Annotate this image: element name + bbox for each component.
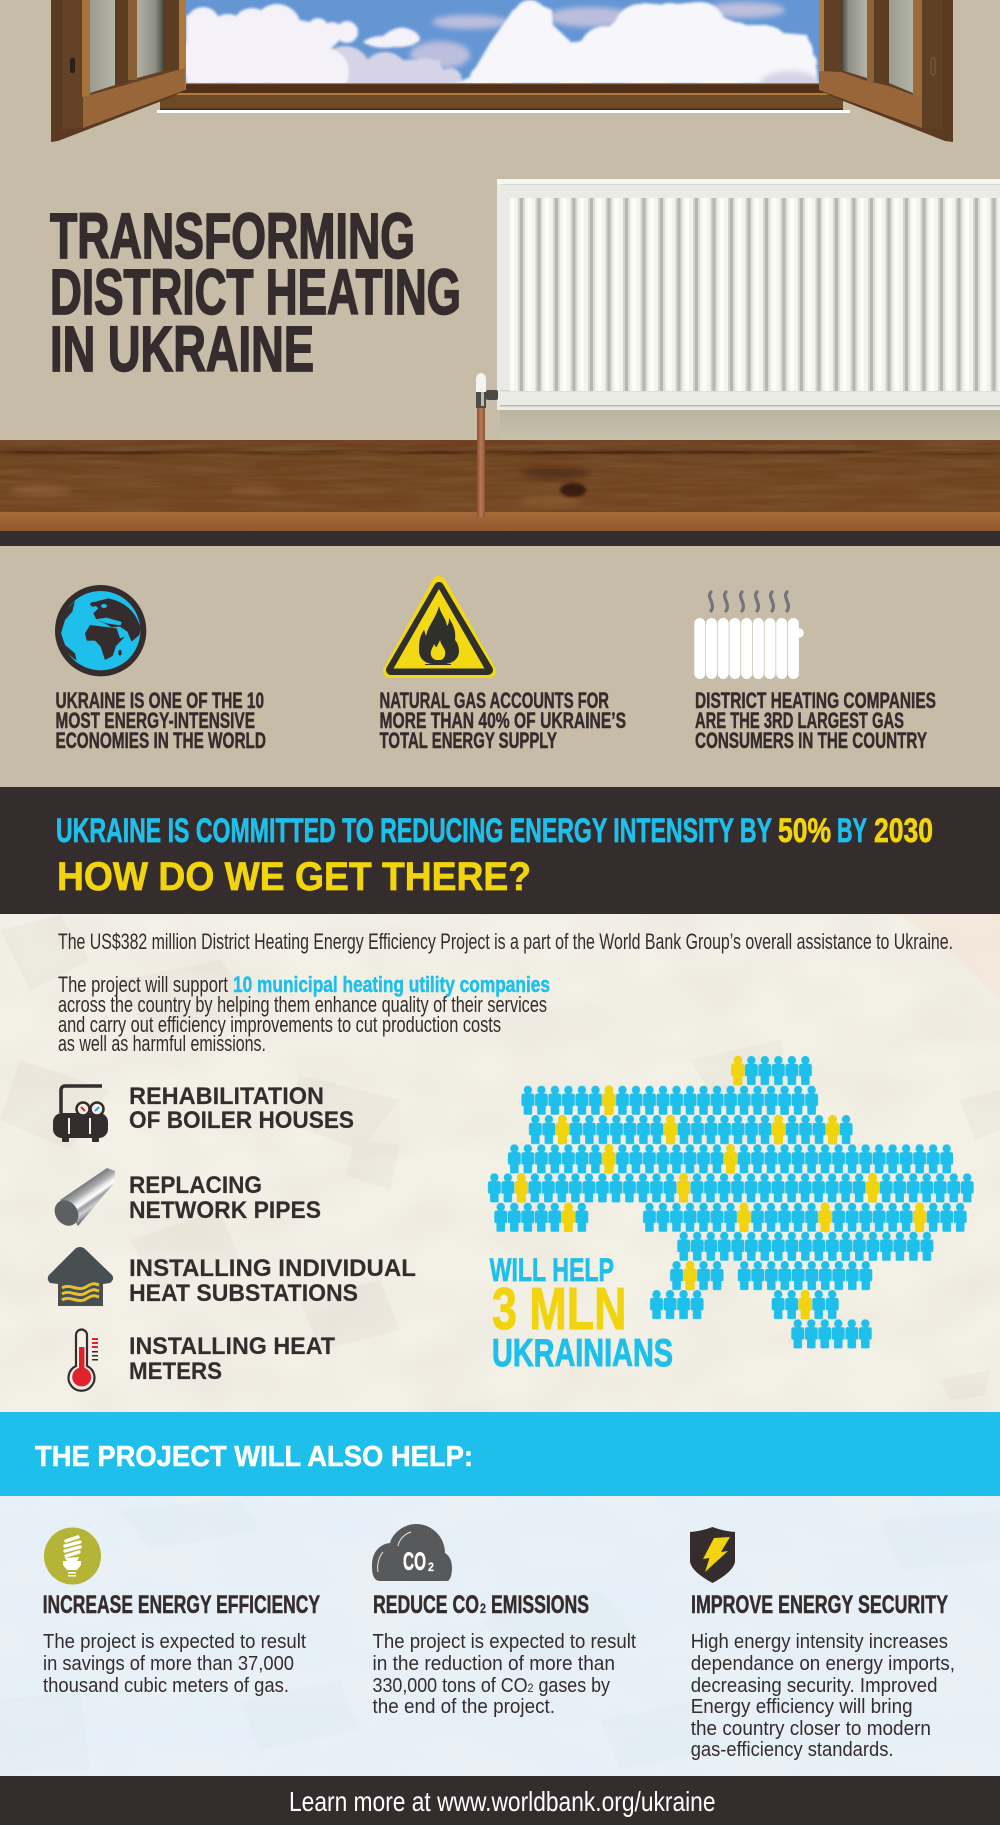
efficiency text: in savings of more than 37,000 [43,1653,294,1675]
project support text: The project will support [58,972,228,997]
heat meters text: METERS [129,1358,222,1385]
window with open shutters and sky [51,0,953,142]
callout: will help 3 mln Ukrainians: WILL HELP [490,1252,614,1288]
question heading: HOW DO WE GET THERE? [57,855,531,899]
icon: flammable warning triangle [390,583,489,671]
dark divider bar [0,531,1000,546]
security text: the country closer to modern [691,1718,931,1740]
commitment headline: 50% [778,812,831,850]
radiator fins [510,198,1000,391]
efficiency text: thousand cubic meters of gas. [43,1675,289,1697]
project support text [58,972,550,1056]
callout: will help 3 mln Ukrainians: 3 MLN [492,1276,626,1342]
heat substations text [129,1255,416,1307]
radiator shadow [500,410,1000,440]
emissions heading: REDUCE CO [373,1591,479,1619]
banner: commitment [0,787,1000,914]
icon: radiator with steam [694,592,804,679]
replacing pipes text [129,1172,321,1224]
callout: will help 3 mln Ukrainians [490,1252,673,1375]
project support text: and carry out efficiency improvements to cut production costs [58,1012,501,1037]
icon: energy saving bulb [44,1528,101,1584]
icon: pipe [50,1168,115,1230]
fact: energy intensive economies: ECONOMIES IN THE WORLD [56,728,266,753]
emissions text: in the reduction of more than [372,1653,615,1675]
emissions heading: 2 [480,1600,486,1616]
icon: CO2 cloud [372,1524,452,1581]
project support text: across the country by helping them enhance quality of their services [58,992,547,1017]
security text: High energy intensity increases [691,1631,948,1653]
icon: CO2 cloud: 2 [428,1560,434,1574]
emissions heading: EMISSIONS [491,1591,589,1619]
heat substations text: HEAT SUBSTATIONS [129,1280,358,1307]
fact: natural gas share: NATURAL GAS ACCOUNTS FOR [380,688,609,713]
banner: the project will also help [0,1412,1000,1496]
emissions text: 330,000 tons of CO2 gases by [372,1675,610,1697]
security text [691,1631,955,1761]
security text: decreasing security. Improved [691,1675,938,1697]
commitment headline: BY [837,812,867,850]
fact: energy intensive economies: UKRAINE IS ONE OF THE 10 [56,688,264,713]
security text: Energy efficiency will bring [691,1696,913,1718]
footer link text: Learn more at www.worldbank.org/ukraine [289,1786,716,1817]
clouds [186,0,819,83]
fact: natural gas share: MORE THAN 40% OF UKRAINE’S [380,708,626,733]
rehabilitation text: OF BOILER HOUSES [129,1107,354,1134]
emissions heading [373,1591,589,1619]
security text: gas-efficiency standards. [691,1739,894,1761]
project support text: 10 municipal heating utility companies [233,972,550,997]
icon: CO2 cloud: CO [403,1548,426,1576]
heat meters text [129,1333,335,1385]
title: DISTRICT HEATING [50,256,461,328]
rehabilitation text [129,1083,354,1134]
fact: energy intensive economies: MOST ENERGY-INTENSIVE [56,708,255,733]
commitment headline: 2030 [874,812,933,850]
rehabilitation text: REHABILITATION [129,1083,324,1110]
background: beige wall [0,0,1000,787]
radiator [497,179,1000,440]
project support text: as well as harmful emissions. [58,1031,266,1056]
efficiency heading: INCREASE ENERGY EFFICIENCY [43,1591,320,1619]
window sill [157,83,850,113]
title: TRANSFORMING [50,200,415,272]
banner heading: THE PROJECT WILL ALSO HELP: [35,1441,473,1473]
fact: energy intensive economies [56,688,266,753]
radiator valve and copper pipe [476,373,498,517]
replacing pipes text: REPLACING [129,1172,262,1199]
efficiency text: The project is expected to result [43,1631,306,1653]
radiator body [497,179,1000,410]
footer [0,1776,1000,1825]
fact: district heating consumers: ARE THE 3RD LARGEST GAS [695,708,904,733]
icon: boiler [53,1086,108,1142]
emissions text: the end of the project. [372,1696,555,1718]
efficiency text [43,1631,306,1697]
fact: natural gas share: TOTAL ENERGY SUPPLY [380,728,557,753]
heat meters text: INSTALLING HEAT [129,1333,335,1360]
title [50,200,461,385]
emissions text: The project is expected to result [372,1631,636,1653]
icon: shield with lightning bolt [690,1527,735,1583]
replacing pipes text: NETWORK PIPES [129,1197,321,1224]
icon: globe [55,585,146,676]
left shutter [51,0,186,142]
fact: natural gas share [380,688,626,753]
sky [186,0,820,84]
emissions text [372,1631,636,1718]
security text: dependance on energy imports, [691,1653,955,1675]
panel: benefits [0,1496,1000,1776]
heat substations text: INSTALLING INDIVIDUAL [129,1255,416,1282]
fact: district heating consumers [695,688,936,753]
icon: thermometer [68,1330,98,1391]
icon: house with heat [48,1247,113,1306]
fact row [55,583,936,753]
panel: how we get there [0,914,1000,1412]
callout: will help 3 mln Ukrainians: UKRAINIANS [492,1332,673,1375]
skirting board and floor [0,440,1000,531]
chart: map of Ukraine made of people [488,1056,974,1349]
right shutter [819,0,953,142]
title: IN UKRAINE [50,313,314,385]
